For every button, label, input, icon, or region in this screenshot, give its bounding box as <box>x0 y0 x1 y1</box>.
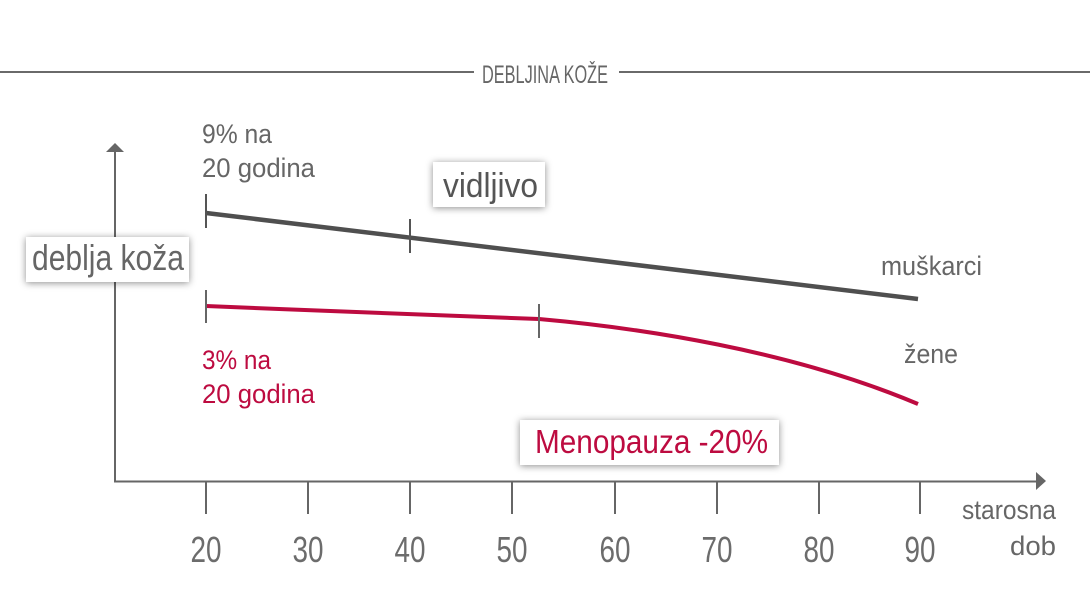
x axis labels: 90 <box>904 529 936 570</box>
title rule right <box>619 71 1090 73</box>
x axis labels: 50 <box>496 529 528 570</box>
x axis labels: 30 <box>292 529 324 570</box>
axes <box>106 143 1046 490</box>
label: women: žene <box>904 339 958 369</box>
x axis labels: 40 <box>394 529 426 570</box>
x axis title: starosna <box>962 495 1057 525</box>
x axis title <box>962 495 1057 561</box>
men 20 years note: 20 godina <box>202 153 316 183</box>
title: DEBLJINA KOŽE <box>482 60 608 89</box>
women line <box>206 290 918 404</box>
x axis labels: 70 <box>702 529 732 570</box>
x axis title: dob <box>1010 531 1056 561</box>
label: men: muškarci <box>881 251 982 281</box>
women 20 years note: 20 godina <box>202 379 316 409</box>
x axis labels <box>190 529 936 570</box>
women 20 years note: 3% na <box>202 345 272 375</box>
x axis ticks <box>206 482 920 514</box>
x axis labels: 80 <box>804 529 834 570</box>
callout: menopause: Menopauza -20% <box>535 423 768 460</box>
x axis labels: 20 <box>190 529 222 570</box>
men line <box>206 194 918 299</box>
women 20 years note <box>202 345 316 409</box>
x axis labels: 60 <box>600 529 630 570</box>
callout: thicker skin: deblja koža <box>32 237 185 278</box>
men 20 years note: 9% na <box>202 119 273 149</box>
men 20 years note <box>202 119 316 183</box>
title rule left <box>0 71 474 73</box>
callout: visible: vidljivo <box>443 167 538 205</box>
